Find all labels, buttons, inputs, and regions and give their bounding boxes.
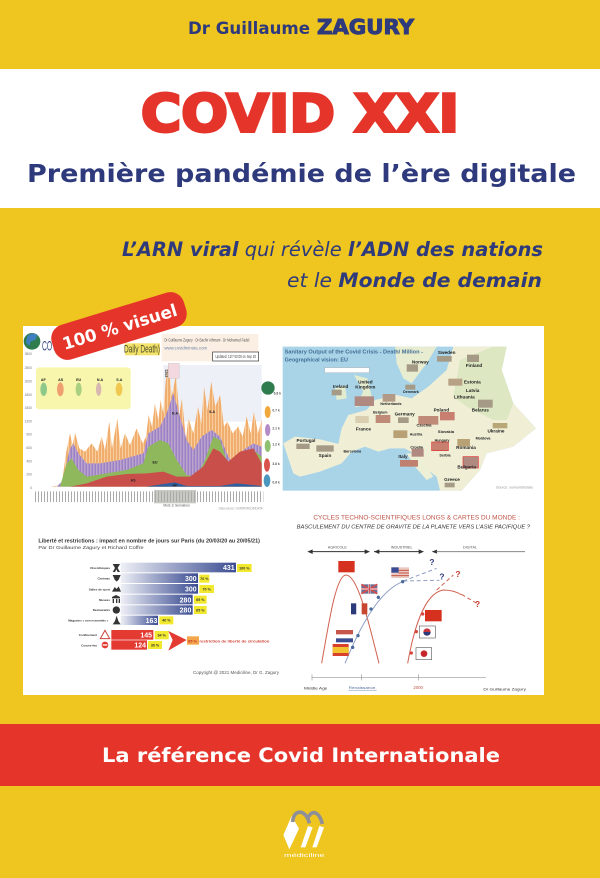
chart credits: Dr Guillaume Zagury · Dr Bachir Athmani · Dr Mohamed Fadel <box>164 337 249 342</box>
legend: continents: EU <box>76 378 82 382</box>
legend: totals <box>261 381 281 487</box>
curve points <box>351 580 424 655</box>
white sheet of charts <box>23 326 544 695</box>
venue icons <box>112 564 121 624</box>
legend: totals: 2.1 k <box>272 426 280 430</box>
percent tags: 70 % <box>202 587 212 591</box>
stacked area chart: AS <box>130 479 136 483</box>
question marks: ? <box>439 571 444 581</box>
legend: totals: 1.2 k <box>272 442 280 446</box>
map title <box>285 349 423 373</box>
country labels: Germany <box>395 412 415 417</box>
logo name: médiciline <box>284 853 325 859</box>
percent tags: 65 % <box>196 608 205 612</box>
country labels: Greece <box>444 477 460 482</box>
era arrows <box>307 546 525 554</box>
country labels: Serbia <box>439 454 452 458</box>
country labels: Poland <box>434 408 449 413</box>
country labels: Norway <box>412 359 429 364</box>
peak annotation <box>165 363 179 378</box>
country labels: Bulgaria <box>457 464 476 469</box>
country labels: Croatia <box>410 446 424 450</box>
legend: totals: 3.8 k <box>272 462 280 466</box>
country labels: Czechia <box>416 423 432 428</box>
bar labels: Magasins « non essentiels » <box>68 618 109 622</box>
highlighted plot background <box>163 365 262 422</box>
title: COVID XXI <box>141 84 459 144</box>
badge: 100 % visuel <box>48 289 190 363</box>
timeline: Renaissance. <box>349 685 377 690</box>
flags <box>333 561 442 660</box>
chart heading: Daily Death) <box>124 344 160 356</box>
legend: continents: AS <box>58 378 64 382</box>
country labels: Romania <box>456 445 476 450</box>
legend: continents: S.A <box>116 378 123 382</box>
arrow <box>168 631 187 651</box>
y axis: 1200 <box>25 419 32 423</box>
question marks: ? <box>475 599 480 609</box>
y axis: 1500 <box>25 406 32 410</box>
cycles title <box>297 514 531 530</box>
country labels: Lithuania <box>454 395 475 400</box>
cycles title: BASCULEMENT DU CENTRE DE GRAVITE DE LA PLANETE VERS L’ASIE PACIFIQUE ? <box>297 524 531 530</box>
bar labels: Musées <box>99 598 110 602</box>
bar labels: Cinémas <box>98 577 110 581</box>
chart title: Liberté et restrictions : impact en nombre de jours sur Paris (du 20/03/20 au 20/05/21) <box>38 538 260 544</box>
curves <box>322 568 477 663</box>
era arrows: INDUSTRIEL <box>391 546 413 550</box>
question marks: ? <box>429 557 434 567</box>
bar labels: Couvre-feu <box>81 643 97 647</box>
y axis: 1800 <box>25 393 32 397</box>
stacked area chart: S.A <box>209 410 215 414</box>
death-rate boxes <box>296 355 507 487</box>
chart title: Par Dr Guillaume Zagury et Richard Coffre <box>38 545 144 551</box>
chart credits <box>162 334 259 361</box>
chart heading: COV <box>42 338 57 354</box>
country labels: Denmark <box>403 390 420 394</box>
stacked area chart: N.A <box>172 412 179 416</box>
percent tags: 30 % <box>151 643 160 647</box>
blue bars: 280 <box>180 608 191 615</box>
era arrows: AGRICOLE <box>328 546 347 550</box>
warning icons <box>100 630 110 648</box>
chart credits: www.covidminute.com <box>164 346 208 351</box>
badge: 100 % visuel: 100 % visuel <box>60 301 180 355</box>
blue bars: 300 <box>185 576 197 583</box>
blue bars: 280 <box>180 597 191 604</box>
question marks <box>429 557 480 609</box>
country labels: Belgium <box>373 411 388 415</box>
chart credits: Updated: 12/7 00:00 on Sep 20 <box>215 354 256 359</box>
country labels: Spain <box>319 453 331 458</box>
country labels: Italy <box>398 454 408 459</box>
country labels: United <box>358 379 373 384</box>
cycles title: CYCLES TECHNO-SCIENTIFIQUES LONGS & CARTES DU MONDE : <box>313 514 520 521</box>
map title: Sanitary Output of the Covid Crisis - Death/ Million - <box>285 349 423 355</box>
restriction callout: 65 % <box>188 638 198 643</box>
red bars: 124 <box>134 643 146 650</box>
red bars: 145 <box>140 632 152 639</box>
tagline <box>122 238 543 292</box>
panel: world daily deaths chart <box>24 333 281 510</box>
timeline: Dr Guillaume Zagury <box>483 687 526 692</box>
stacked area chart: AF <box>173 484 178 488</box>
x axis: Mois 1/ Semaines <box>163 504 190 508</box>
percent tags: 70 % <box>200 577 209 581</box>
bar labels <box>68 566 110 647</box>
x axis: Data source: OURWORLDINDATA <box>219 505 263 510</box>
legend: totals: 6.8 k <box>274 392 281 396</box>
panel: europe map <box>283 347 536 491</box>
red bars <box>111 630 153 650</box>
country labels: Moldova <box>476 437 491 441</box>
chart title <box>38 538 260 551</box>
country labels: Portugal <box>297 438 315 443</box>
bar labels: Discothèques <box>90 566 110 570</box>
x axis <box>35 490 263 510</box>
author name <box>188 15 415 39</box>
blue bars <box>121 563 236 625</box>
country labels: Sweden <box>438 350 456 355</box>
y axis: 0 <box>30 486 32 490</box>
percent tags <box>148 564 252 649</box>
legend: totals: 0.8 k <box>272 481 280 485</box>
blue bars: 431 <box>223 565 235 572</box>
era arrows: DIGITAL <box>463 546 477 550</box>
blue bars: 163 <box>146 618 157 625</box>
author name: ZAGURY <box>317 15 415 39</box>
percent tags: 34 % <box>157 634 167 638</box>
red banner: La référence Covid Internationale <box>102 744 500 767</box>
country labels: Hungary <box>435 439 450 443</box>
y axis: 400 <box>26 459 32 463</box>
bar labels: Salles de sport <box>89 587 110 591</box>
bar labels: Restaurants <box>93 608 110 612</box>
timeline: Middle Age <box>304 685 328 690</box>
country labels: Austria <box>410 433 423 437</box>
country labels: Barcelona <box>343 449 362 453</box>
legend: continents: N.A <box>97 378 104 382</box>
y axis: 900 <box>26 433 32 437</box>
timeline: 2000 <box>413 685 424 690</box>
question marks: ? <box>455 569 460 579</box>
y axis <box>25 352 32 490</box>
country labels: Kingdom <box>355 385 375 390</box>
source note: Source: ourworldindata <box>496 485 533 490</box>
bar labels: Confinement <box>79 633 97 637</box>
legend: continents: AF <box>41 378 47 382</box>
restriction callout: restriction de liberté de circulation <box>199 638 270 643</box>
legend: continents <box>36 367 131 409</box>
peak annotation: 2021 <box>165 369 169 377</box>
percent tags: 65 % <box>196 598 205 602</box>
map background <box>283 347 536 491</box>
country labels: Ireland <box>333 384 348 389</box>
y axis: 3500 <box>25 352 32 356</box>
country labels: Ukraine <box>487 428 505 433</box>
y axis: 2500 <box>25 366 32 370</box>
country labels: Latvia <box>466 388 480 393</box>
panel: techno-scientific cycles <box>297 514 531 692</box>
logo mark <box>283 812 324 849</box>
y axis: 600 <box>26 446 32 450</box>
country labels: Netherlands <box>380 402 402 406</box>
stacked area chart <box>50 363 262 488</box>
author name: Dr Guillaume <box>188 19 310 38</box>
stacked area chart: EU <box>152 461 158 465</box>
legend: totals: 0.7 k <box>272 408 280 412</box>
percent tags: 40 % <box>162 619 171 623</box>
chart heading <box>24 333 160 356</box>
country labels: Finland <box>466 363 482 368</box>
tagline: L’ARN viral qui révèle l’ADN des nations <box>122 238 543 261</box>
subtitle: Première pandémie de l’ère digitale <box>27 159 576 188</box>
red banner <box>0 724 600 786</box>
publisher logo <box>283 812 325 859</box>
percent tags: 100 % <box>239 566 250 570</box>
country labels: France <box>356 427 371 432</box>
country labels: Belarus <box>472 407 489 412</box>
country labels <box>297 350 505 482</box>
title band <box>0 69 600 208</box>
copyright: Copyright @ 2021 Mediciline, Dr G. Zagury <box>193 670 280 675</box>
map title: Geographical vision: EU <box>285 357 348 363</box>
tagline: et le Monde de demain <box>287 269 542 292</box>
panel: freedom restrictions chart <box>38 538 280 675</box>
restriction callout <box>187 636 270 645</box>
country labels: Estonia <box>464 380 481 385</box>
y axis: 200 <box>26 473 32 477</box>
country labels: Slovakia <box>438 429 455 434</box>
timeline <box>304 674 526 692</box>
blue bars: 300 <box>185 587 197 594</box>
y axis: 2000 <box>25 379 32 383</box>
